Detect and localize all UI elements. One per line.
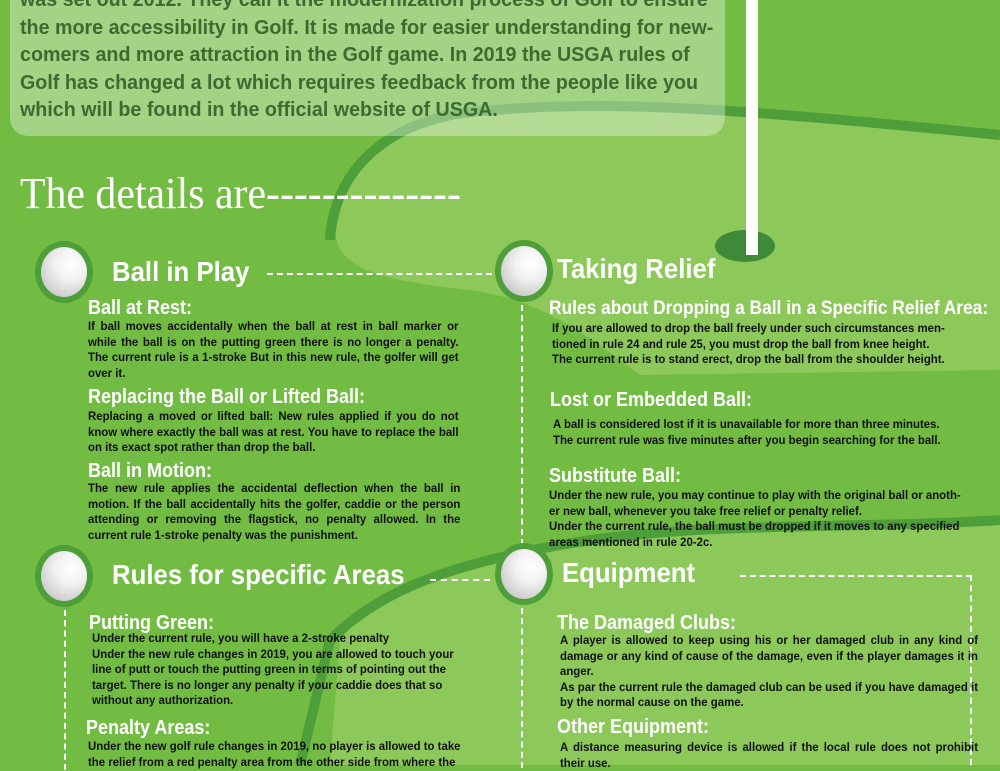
panel: Ball in Play: attending or removing the flagstick, no penalty allowed. In the xyxy=(88,512,460,526)
panel: Taking Relief: er new ball, whenever you take free relief or penalty relief. xyxy=(549,504,862,518)
subsection: replacing: Replacing the Ball or Lifted Ball: xyxy=(88,386,365,408)
panel: Ball in Play xyxy=(35,241,492,542)
intro text: comers and more attraction in the Golf game. In 2019 the USGA rules of xyxy=(20,43,690,66)
subsection: damaged clubs: The Damaged Clubs: xyxy=(557,612,736,634)
panel: Equipment: damage or any kind of cause of the damage, even if the player damages it in xyxy=(560,648,978,662)
panel: Ball in Play: over it. xyxy=(88,366,125,380)
subsection: other equipment: Other Equipment: xyxy=(557,716,709,738)
panel: Ball in Play: The new rule applies the accidental deflection when the ball in xyxy=(88,481,460,495)
panel: Taking Relief: A ball is considered lost if it is unavailable for more than three minutes. xyxy=(553,417,940,431)
panel: Taking Relief xyxy=(495,240,988,548)
panel: Equipment: A distance measuring device is allowed if the local rule does not prohibit xyxy=(560,740,978,754)
intro text: which will be found in the official website of USGA. xyxy=(20,98,498,121)
panel: Ball in Play: Replacing a moved or lifted ball: New rules applied if you do not xyxy=(88,409,458,423)
icon: golf ball xyxy=(35,241,93,303)
heading: Taking Relief xyxy=(557,253,715,284)
panel: Equipment: their use. xyxy=(560,756,611,770)
panel: Equipment xyxy=(495,543,978,770)
panel: Ball in Play: The current rule is a 1-stroke But in this new rule, the golfer will get xyxy=(88,350,458,364)
intro text: Golf has changed a lot which requires feedback from the people like you xyxy=(20,70,698,94)
panel: Equipment: A player is allowed to keep using his or her damaged club in any kind of xyxy=(560,633,978,647)
panel: Ball in Play: on its exact spot rather than drop the ball. xyxy=(88,440,315,454)
subsection: ball in motion: Ball in Motion: xyxy=(88,460,212,482)
intro text xyxy=(20,0,713,121)
panel: Taking Relief: Under the current rule, the ball must be dropped if it moves to any specified xyxy=(549,519,959,533)
heading: Ball in Play xyxy=(112,256,249,287)
icon: golf ball xyxy=(495,240,553,302)
intro text: the more accessibility in Golf. It is made for easier understanding for new- xyxy=(20,16,713,38)
panel: Rules for specific Areas xyxy=(35,545,490,770)
icon: golf ball xyxy=(35,545,93,607)
intro text box xyxy=(10,0,725,136)
panel: Taking Relief: The current rule was five minutes after you begin searching for the ball. xyxy=(553,432,941,446)
subsection: dropping: Rules about Dropping a Ball in a Specific Relief Area: xyxy=(549,297,988,319)
panel: Ball in Play: current rule 1-stroke penalty was the punishment. xyxy=(88,528,358,542)
subsection: substitute: Substitute Ball: xyxy=(549,465,681,487)
subsection: putting green: Putting Green: xyxy=(89,612,214,634)
panel: Taking Relief: areas mentioned in rule 20-2c. xyxy=(549,534,712,548)
heading: Equipment xyxy=(562,557,695,588)
panel: Ball in Play: know where exactly the ball was at rest. You have to replace the ball xyxy=(88,424,458,438)
panel: Rules for specific Areas: target. There is no longer any penalty if your caddie does that so xyxy=(92,678,442,692)
panel: Taking Relief: tioned in rule 24 and rule 25, you must drop the ball from knee height. xyxy=(552,336,930,350)
panel: Ball in Play: while the ball is on the putting green there is no longer a penalty. xyxy=(88,334,458,348)
subsection: penalty areas: Penalty Areas: xyxy=(86,717,210,739)
title: The details are-------------- xyxy=(20,169,461,218)
panel: Rules for specific Areas: Under the new golf rule changes in 2019, no player is allowed to take xyxy=(88,739,461,753)
panel: Ball in Play: If ball moves accidentally when the ball at rest in ball marker or xyxy=(88,319,458,333)
panel: Ball in Play: motion. If the ball accidentally hits the golfer, caddie or the person xyxy=(88,496,460,510)
panel: Rules for specific Areas: the relief from a red penalty area from the other side from where the xyxy=(88,754,455,768)
panel: Rules for specific Areas: without any authorization. xyxy=(92,693,233,707)
subsection: lost ball: Lost or Embedded Ball: xyxy=(550,389,752,411)
panel: Equipment: by the normal cause on the game. xyxy=(560,695,744,709)
panel: Equipment: anger. xyxy=(560,664,594,678)
panel: Rules for specific Areas: Under the new rule changes in 2019, you are allowed to touch your xyxy=(92,646,454,660)
panel: Taking Relief: If you are allowed to drop the ball freely under such circumstances men- xyxy=(552,321,945,335)
panel: Rules for specific Areas: line of putt or touch the putting green in terms of pointing out the xyxy=(92,662,446,676)
subsection: ball at rest: Ball at Rest: xyxy=(88,297,192,319)
panel: Taking Relief: The current rule is to stand erect, drop the ball from the shoulder height. xyxy=(552,352,945,366)
flag pole and hole xyxy=(715,0,775,262)
panel: Taking Relief: Under the new rule, you may continue to play with the original ball or anoth- xyxy=(549,488,961,502)
icon: golf ball xyxy=(495,543,553,605)
panel: Rules for specific Areas: Under the current rule, you will have a 2-stroke penalty xyxy=(92,631,389,645)
heading: Rules for specific Areas xyxy=(112,559,405,590)
panel: Equipment: As par the current rule the damaged club can be used if you have damaged it xyxy=(560,680,978,694)
